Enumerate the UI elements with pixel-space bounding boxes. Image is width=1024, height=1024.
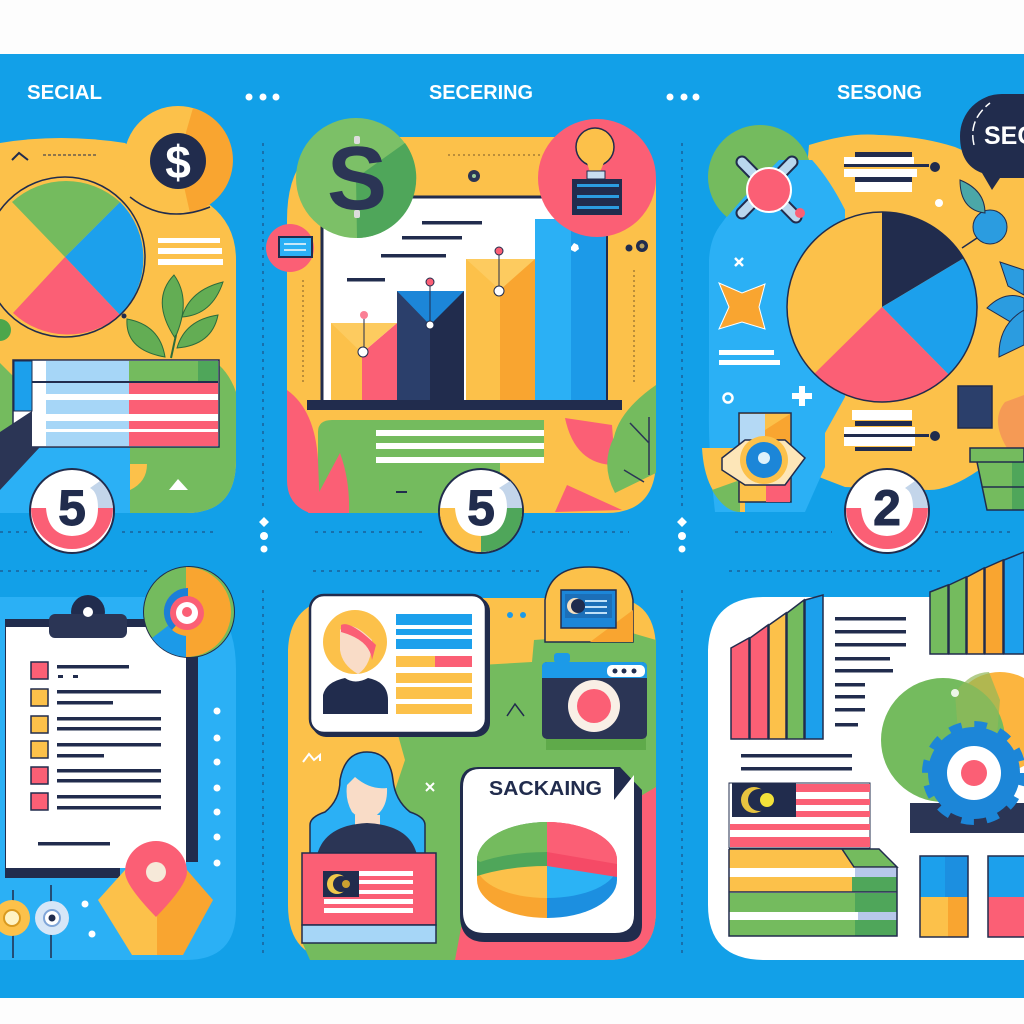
card bars [396,614,472,714]
small triangle [169,479,188,490]
icon: potted plant [970,395,1024,510]
profile card [310,595,490,737]
chart board [322,197,607,402]
icon: coin connectors [0,885,69,958]
small bars bottom [920,856,1024,937]
text lines left [719,350,812,406]
connector curve [130,197,210,214]
icon: star [719,283,765,329]
text lines on green [376,430,544,493]
badge: 5 [438,468,524,554]
small x [735,258,743,266]
icon: chat card with crescent [545,567,633,642]
clipboard [5,595,198,878]
badge: 5 [29,468,115,554]
bar chart right [930,552,1024,654]
icon: camera [542,653,647,750]
panel: top middle bar chart [266,118,656,554]
panel: top right pie [702,94,1024,554]
green leaf at left edge [0,319,11,341]
icon: dollar coin: $ [165,136,191,188]
badge: 5: 5 [58,480,86,536]
icon: location hexagon [98,841,213,955]
panel: bottom left checklist [0,566,236,960]
icon: molecule cross [742,162,805,218]
badge: 2 [844,468,930,554]
panel: top left finance [0,106,236,554]
card: SACKAING pie [460,767,642,942]
heading: SESONG: SESONG [837,81,922,104]
speech bubble SEC [960,94,1024,190]
icon: dollar circle [296,118,416,238]
flag [729,783,870,848]
small badge left [266,224,314,272]
badge: 2: 2 [873,480,901,536]
small chevron and dotted line [12,153,98,160]
heading lines top [844,152,940,192]
leaves right [987,262,1024,357]
chart baseline [307,400,622,410]
text lines with pointer [844,410,940,451]
dotted lines on panel [303,155,634,385]
icon: dollar coin [124,106,233,214]
small marks [303,704,524,791]
icon: dollar circle: S [327,129,387,229]
pie chart [0,177,145,337]
blob circles [881,672,1024,833]
icon: gear [928,727,1020,819]
icon: hex gear [702,413,805,512]
pie chart [787,212,978,403]
bars [331,219,607,400]
text lines [158,238,223,265]
dots between headings right [666,94,700,100]
flag [302,853,436,943]
data table [13,360,219,447]
leaves [287,385,656,513]
dotted dividers [0,143,1015,955]
pie disc [477,822,617,918]
card: SACKAING pie: SACKAING [489,778,602,800]
heading: SECERING: SECERING [429,81,533,104]
heading: SECIAL: SECIAL [27,81,102,104]
icon: gear badge [143,566,235,658]
text lines [741,617,906,770]
icon: magnifier handle [0,411,40,490]
badge: 5: 5 [467,480,495,536]
dots column [82,708,220,938]
small dots [468,170,648,252]
white dot [935,199,943,207]
panel: bottom middle profile [288,567,656,960]
icon: plant [127,275,223,358]
bar chart left [731,595,823,739]
dots [507,612,526,618]
stacked books [729,849,897,936]
small dark square [958,386,992,428]
checklist rows [31,662,48,810]
dots between headings left [246,94,280,100]
center dot marks [259,517,687,552]
icon: lightbulb circle [538,119,656,237]
panel: bottom right report [708,552,1024,960]
bar pins [358,247,504,357]
figure with flag [302,752,436,943]
icon: blue berry plant [960,180,1007,248]
